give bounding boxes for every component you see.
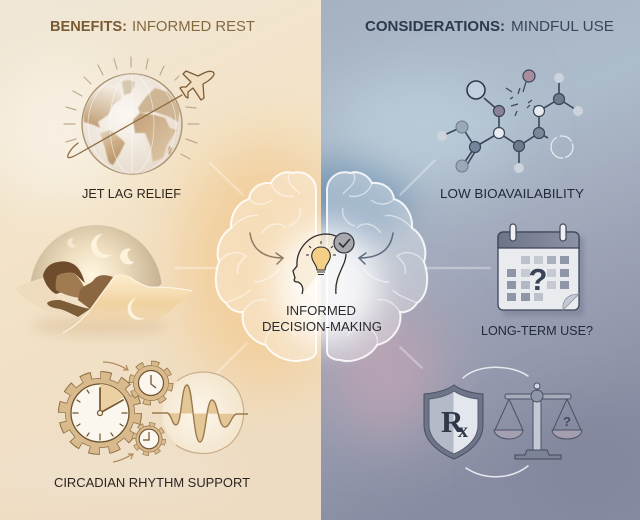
title: benefits heading: BENEFITS: (50, 18, 127, 35)
calendar header (498, 232, 579, 248)
continents (84, 80, 180, 165)
label: jet lag relief: JET LAG RELIEF (82, 186, 181, 201)
title: considerations heading: MINDFUL USE (511, 18, 614, 35)
label: informed decision-making: DECISION-MAKING (262, 320, 382, 334)
wave line (152, 385, 248, 442)
large gear (62, 375, 138, 451)
page curl (563, 294, 579, 310)
inward arrows (250, 233, 283, 264)
icon: molecule (437, 70, 583, 173)
question mark: ? (529, 262, 547, 297)
icon: prescription shield and scales: ? (563, 414, 571, 429)
icon: prescription shield and scales (424, 367, 582, 477)
panel: benefits background (0, 0, 350, 520)
check badge (334, 233, 354, 253)
calendar shadow (502, 236, 584, 316)
atoms (467, 81, 485, 99)
orbit arcs (463, 367, 528, 477)
clock face (71, 384, 129, 442)
shield (424, 385, 483, 459)
face (56, 273, 84, 298)
icon: calendar with question mark (498, 224, 584, 316)
right pan (553, 399, 581, 430)
title: benefits heading: INFORMED REST (132, 18, 255, 35)
moons (67, 234, 158, 320)
night circle (30, 225, 162, 295)
label: circadian rhythm support: CIRCADIAN RHYTHM SUPPORT (54, 475, 250, 490)
panel: considerations background (290, 0, 640, 520)
date grid (507, 256, 569, 301)
lightbulb (312, 247, 330, 270)
calendar page (498, 232, 579, 310)
globe sphere (82, 74, 182, 174)
arm (47, 300, 90, 317)
meridians (88, 74, 176, 174)
label: informed decision-making (262, 304, 382, 334)
pillow (15, 278, 85, 317)
label: informed decision-making: INFORMED (286, 304, 356, 318)
broken bonds (506, 82, 538, 116)
wave circle (162, 372, 244, 454)
icon: clock gears and rhythm wave (62, 362, 248, 462)
motion arrows (103, 362, 133, 462)
head with lightbulb icon (293, 234, 346, 294)
left pan (495, 399, 523, 430)
right hemisphere (327, 172, 427, 361)
bonds (442, 78, 578, 168)
flight path (68, 95, 182, 158)
label: long-term use: LONG-TERM USE? (481, 323, 593, 338)
bottom small gear (134, 424, 164, 454)
icon: sleeping person with moons (15, 225, 192, 335)
blanket (63, 274, 192, 334)
title: benefits heading (50, 18, 255, 35)
hair (43, 261, 85, 294)
sun rays (64, 57, 199, 159)
calendar rings (510, 224, 516, 241)
glow: center light (276, 227, 380, 343)
icon: prescription shield and scales: x (458, 420, 468, 442)
title: considerations heading: CONSIDERATIONS: (365, 18, 505, 35)
left hemisphere (216, 172, 316, 361)
icon: globe with airplane (64, 57, 214, 174)
connector rays to the brain (175, 160, 490, 375)
rx symbol: R (441, 404, 464, 439)
top small gear (131, 363, 171, 403)
soft shadow (32, 317, 168, 335)
airplane (180, 71, 214, 100)
scale post and base (533, 396, 541, 450)
label: low bioavailability: LOW BIOAVAILABILITY (440, 186, 584, 201)
scale beam (505, 394, 571, 399)
title: considerations heading (365, 18, 614, 35)
neck and shoulder (78, 275, 113, 309)
brain: central illustration (216, 172, 427, 361)
